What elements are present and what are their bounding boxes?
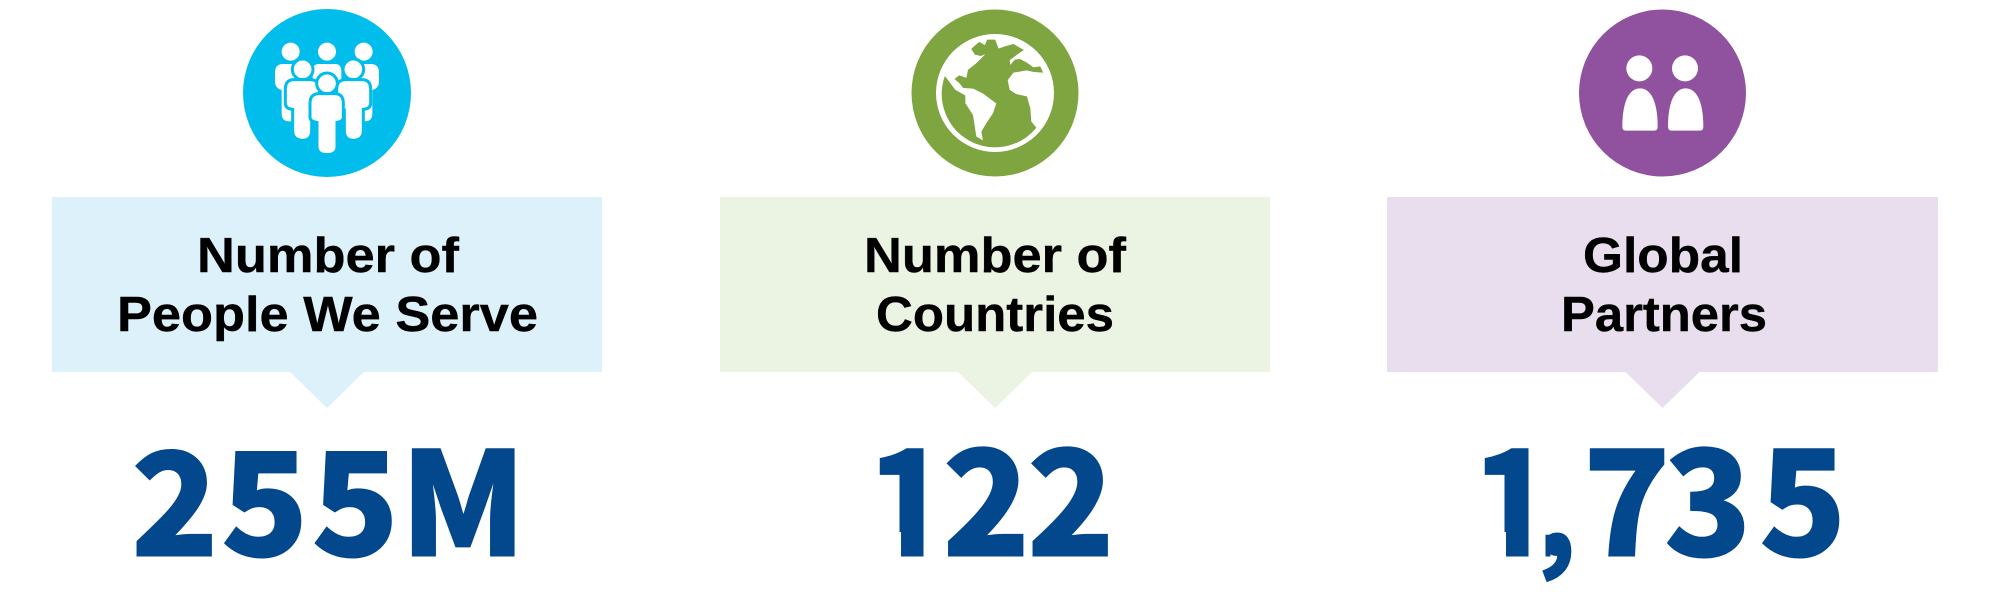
label box with pointer: [720, 197, 1270, 408]
heading: number of countries: Countries: [876, 288, 1114, 342]
heading: global partners: Partners: [1561, 288, 1767, 342]
heading: number of countries: [864, 229, 1127, 342]
icon: two partners: [1579, 10, 1746, 176]
panel: global partners: [1387, 10, 1938, 598]
value: 255M: 255M: [131, 390, 526, 598]
label box with pointer: [52, 197, 602, 408]
value: 122: 122: [866, 390, 1115, 598]
heading: number of people we serve: Number of: [197, 229, 460, 283]
icon: group of people: [243, 9, 411, 177]
value: 1,735: 1,735: [1471, 390, 1847, 598]
heading: global partners: [1561, 229, 1767, 342]
heading: number of countries: Number of: [864, 229, 1127, 283]
heading: number of people we serve: [117, 229, 538, 342]
heading: global partners: Global: [1583, 229, 1743, 283]
panel: people we serve: [52, 9, 602, 598]
icon: globe: [912, 10, 1078, 176]
heading: number of people we serve: People We Serve: [117, 288, 538, 342]
label box with pointer: [1387, 197, 1938, 408]
panel: countries: [720, 10, 1270, 598]
